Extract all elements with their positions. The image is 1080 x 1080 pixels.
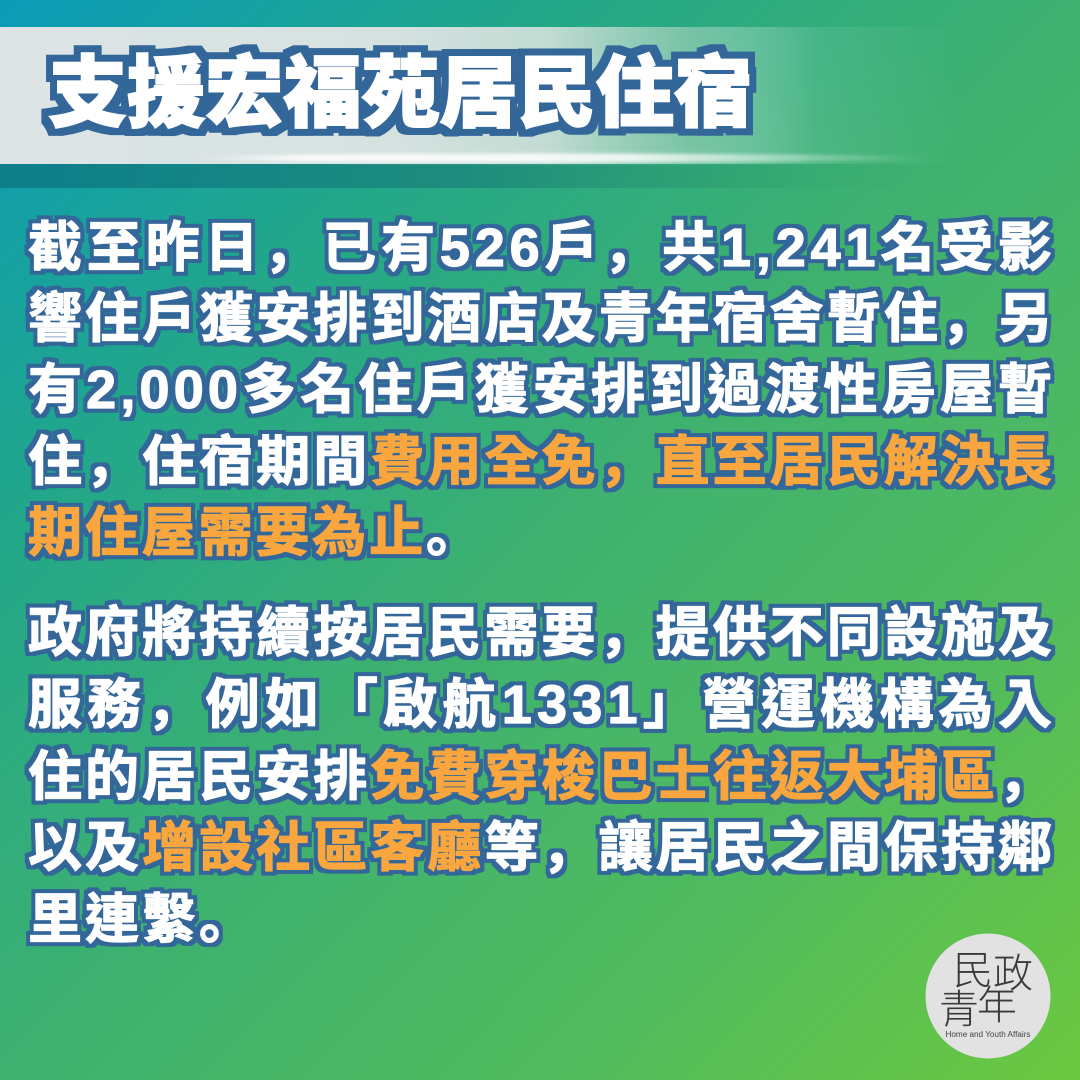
logo: Home and Youth Affairs: 青	[939, 977, 979, 1035]
logo: Home and Youth Affairs	[926, 934, 1050, 1058]
paragraph 2: 政府將持續按居民需要，提供不同設施及	[28, 588, 1052, 667]
paragraph 1: 期住屋需要為止。	[28, 488, 480, 567]
paragraph 2: 以及增設社區客廳等，讓居民之間保持鄰	[28, 803, 1052, 882]
logo: Home and Youth Affairs: 政	[993, 941, 1033, 999]
paragraph 2: 住的居民安排免費穿梭巴士往返大埔區，	[28, 732, 1052, 811]
title: 支援宏福苑居民住宿	[49, 49, 752, 137]
paragraph 2: 里連繫。	[28, 875, 253, 954]
logo: Home and Youth Affairs: 民	[953, 938, 993, 996]
title banner	[0, 27, 960, 188]
paragraph 1: 截至昨日，已有526戶，共1,241名受影	[28, 203, 1052, 282]
logo: Home and Youth Affairs: 年	[977, 973, 1017, 1031]
logo: Home and Youth Affairs: Home and Youth Affairs	[946, 1030, 1030, 1039]
paragraph 1: 住，住宿期間費用全免，直至居民解決長	[28, 417, 1052, 496]
paragraph 1: 有2,000多名住戶獲安排到過渡性房屋暫	[28, 360, 1052, 420]
paragraph 1	[28, 203, 1052, 567]
paragraph 1: 響住戶獲安排到酒店及青年宿舍暫住，另	[28, 274, 1052, 353]
paragraph 2: 服務，例如「啟航1331」營運機構為入	[28, 660, 1052, 739]
paragraph 2	[28, 588, 1052, 954]
